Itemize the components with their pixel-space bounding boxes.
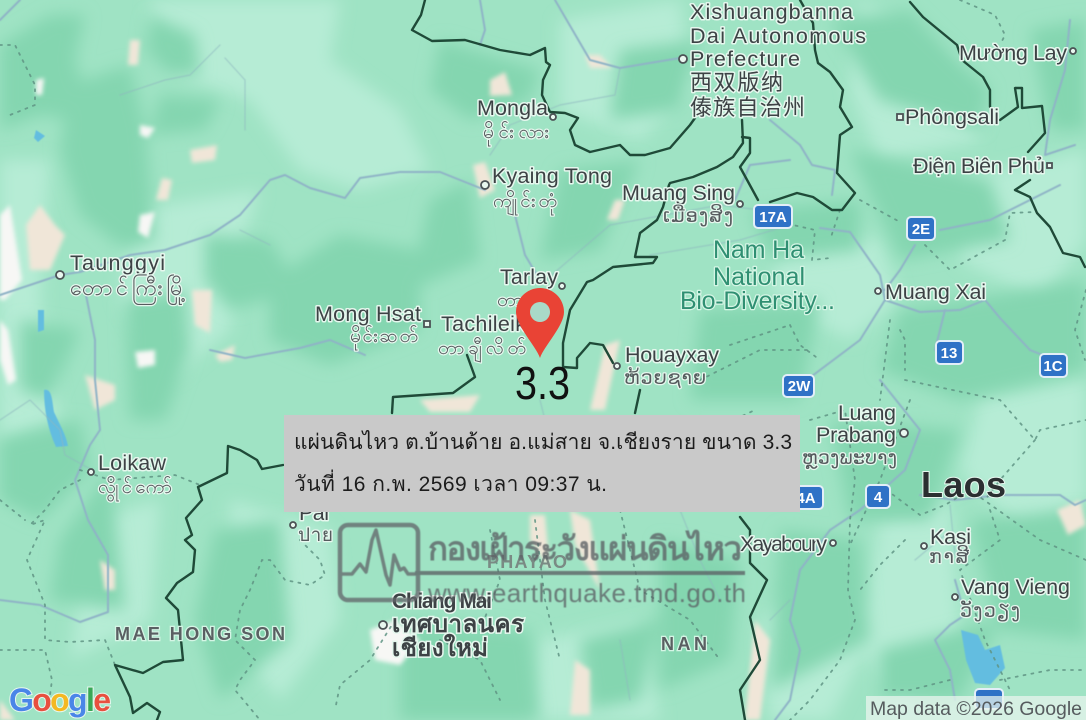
label: Muang Sing xyxy=(622,181,743,227)
shield: 2W xyxy=(783,375,814,397)
label: Pai: Pai xyxy=(299,501,329,525)
label: Vang Vieng xyxy=(952,575,1070,622)
map attribution: Map data ©2026 Google xyxy=(870,698,1082,720)
label: Taunggyi xyxy=(56,251,186,305)
label: Luang Prabang xyxy=(802,401,908,470)
shield: 2E xyxy=(907,217,935,240)
label: Xishuangbanna: 西双版纳 xyxy=(690,65,783,97)
label: Luang Prabang: Prabang xyxy=(816,423,896,447)
label: Nam Ha National Bio-Diversity: Bio-Diversity... xyxy=(680,287,835,315)
label: Taunggyi: တောင်ကြီးမြို့ xyxy=(70,274,186,305)
label: Taunggyi: Taunggyi xyxy=(70,251,165,275)
label: Nan: NAN xyxy=(661,634,707,654)
label: Kasi: Kasi xyxy=(930,525,971,549)
magnitude value: 3.3 xyxy=(515,357,570,409)
label: Tarlay: Tarlay xyxy=(500,265,558,289)
shield: 4: 4 xyxy=(874,489,883,506)
shield: 4A: 4A xyxy=(796,490,816,507)
label: Nam Ha National Bio-Diversity: National xyxy=(713,263,805,291)
label: Houayxay: ຫ້ວຍຊາຍ xyxy=(624,367,706,389)
location pin xyxy=(516,288,564,358)
label: Nam Ha National Bio-Diversity xyxy=(680,236,835,315)
label: Mongla: Mongla xyxy=(477,96,548,120)
watermark rule xyxy=(415,571,745,575)
label: Tarlay: တာ xyxy=(497,290,523,311)
label: Chiang Mai: เทศบาลนคร xyxy=(392,611,524,638)
label: Mongla: မိုင်းလား xyxy=(483,120,549,147)
label: Phayao: PHAYAO xyxy=(487,552,567,572)
label: Muang Xai: Muang Xai xyxy=(885,280,986,304)
label: Laos: Laos xyxy=(921,464,1006,505)
label: Nam Ha National Bio-Diversity: Nam Ha xyxy=(713,236,804,264)
label: Houayxay: Houayxay xyxy=(625,343,719,367)
shield: 4A xyxy=(790,486,823,509)
label: Pai: ปาย xyxy=(298,525,333,546)
info text line 2: วันที่ 16 ก.พ. 2569 เวลา 09:37 น. xyxy=(294,469,607,496)
label: Tachileik xyxy=(438,312,526,363)
watermark url: www.earthquake.tmd.go.th xyxy=(427,578,746,608)
label: Chiang Mai xyxy=(379,590,524,662)
label: Tarlay xyxy=(497,265,565,311)
label: Kyaing Tong: Kyaing Tong xyxy=(492,164,612,188)
shield: 13: 13 xyxy=(941,345,957,362)
label: Tachileik: တာချီလိတ် xyxy=(438,336,526,363)
label: Muang Sing: Muang Sing xyxy=(622,181,735,205)
info text line 1: แผ่นดินไหว ต.บ้านด้าย อ.แม่สาย จ.เชียงราย ขนาด 3.3 xyxy=(294,430,792,454)
label: Loikaw xyxy=(88,451,172,502)
label: Tachileik: Tachileik xyxy=(441,312,526,336)
label: Vang Vieng: ວັງວຽງ xyxy=(960,599,1020,622)
label: Phôngsali: Phôngsali xyxy=(905,105,999,129)
info box xyxy=(284,415,800,512)
shield: 2E: 2E xyxy=(912,221,930,238)
label: Loikaw: လွိုင်ကော် xyxy=(98,475,172,502)
label: Kyaing Tong xyxy=(481,164,612,216)
label: Mae Hong Son: MAE HONG SON xyxy=(115,624,285,644)
label: Chiang Mai: Chiang Mai xyxy=(392,590,492,613)
label: Điện Biên Phủ: Điện Biên Phủ xyxy=(913,154,1045,178)
label: Xishuangbanna: Prefecture xyxy=(690,47,800,71)
label: Mong Hsat: မိုင်းဆတ် xyxy=(350,324,418,351)
label: Luang Prabang: ຫຼວງພະບາງ xyxy=(802,448,897,470)
shield: 17A: 17A xyxy=(759,209,787,226)
shield: bottom xyxy=(975,689,1003,709)
label: Mongla xyxy=(477,96,556,147)
label: Kasi xyxy=(921,525,971,568)
label: Chiang Mai: เชียงใหม่ xyxy=(392,633,488,662)
label: Sayaboury: Xayaboury xyxy=(740,532,827,556)
label: Loikaw: Loikaw xyxy=(98,451,166,475)
shield: 4 xyxy=(866,485,890,508)
label: Luang Prabang: Luang xyxy=(838,401,896,425)
label: Xishuangbanna: 傣族自治州 xyxy=(690,90,805,122)
label: Pai xyxy=(290,501,333,546)
watermark: earthquake monitoring bureau xyxy=(340,525,746,608)
label: Muang Sing: ເມືອງສິງ xyxy=(663,203,733,227)
shield: 1C xyxy=(1040,354,1067,377)
label: Mong Hsat: Mong Hsat xyxy=(315,302,421,326)
label: Mường Lay: Mường Lay xyxy=(959,41,1067,65)
label: Vang Vieng: Vang Vieng xyxy=(961,575,1070,599)
icon: seismograph xyxy=(340,525,418,600)
road shields xyxy=(754,205,1067,709)
label: Xishuangbanna: Dai Autonomous xyxy=(690,24,866,48)
shield: 2W: 2W xyxy=(788,378,811,395)
label: Kyaing Tong: ကျိုင်းတုံ xyxy=(493,189,557,216)
shield: 17A xyxy=(754,205,792,228)
label: Xishuangbanna: Xishuangbanna xyxy=(690,0,853,24)
label: Kasi: ກາສີ xyxy=(929,544,970,568)
label: Xishuangbanna xyxy=(679,0,866,122)
Google logo: Google xyxy=(9,682,111,718)
label: Houayxay xyxy=(614,343,719,389)
label: Mong Hsat xyxy=(315,302,430,351)
shield: 13 xyxy=(936,341,963,364)
watermark title: กองเฝ้าระวังแผ่นดินไหว xyxy=(428,529,742,567)
shield: 1C: 1C xyxy=(1043,358,1063,375)
